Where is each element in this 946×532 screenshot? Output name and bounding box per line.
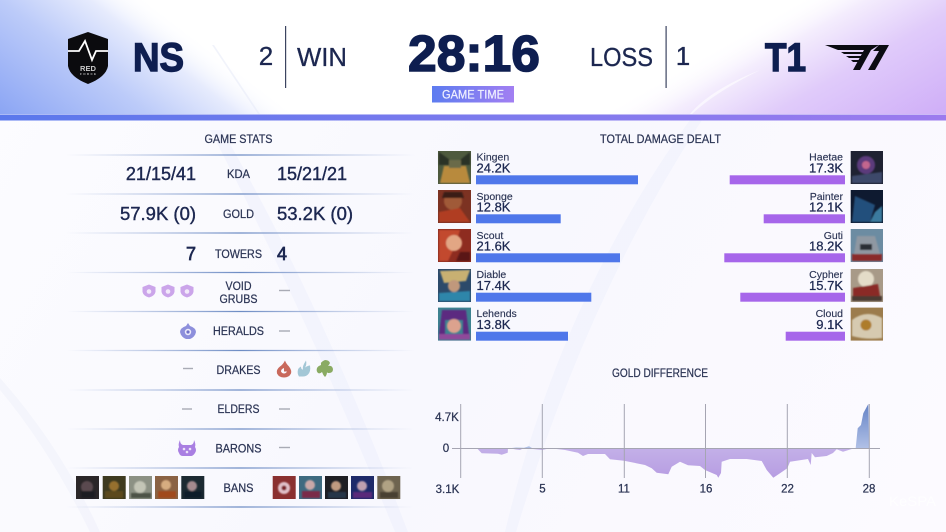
player: Lehends: 13.8K (476, 317, 511, 332)
player: Kingen (438, 151, 638, 184)
row: drakes: DRAKES (216, 365, 261, 377)
row: elders (182, 404, 290, 416)
header band (0, 0, 946, 114)
row: towers: TOWERS (215, 249, 262, 261)
player: Painter (764, 190, 883, 223)
icon: baron (178, 440, 196, 456)
bans: T1 side (273, 476, 400, 499)
axis labels: 11 (618, 484, 630, 496)
axis labels: 16 (700, 484, 712, 496)
row: gold: 57.9K (0) (120, 204, 196, 224)
row: heralds: HERALDS (213, 326, 264, 338)
axis labels (435, 412, 875, 496)
player: Scout: Scout (476, 230, 503, 242)
row: gold: GOLD (223, 209, 254, 221)
player: Cypher (740, 269, 883, 302)
player: Kingen: 24.2K (476, 160, 511, 176)
row: KDA: 15/21/21 (277, 164, 347, 184)
player: Guti: Guti (824, 230, 843, 242)
row: elders: ELDERS (218, 404, 260, 416)
player: Painter: 12.1K (809, 200, 843, 215)
player: Sponge: Sponge (476, 191, 513, 203)
T1 series losses: 1 (676, 41, 690, 71)
row: void grubs: GRUBS (220, 294, 258, 306)
panel: gold difference chart (435, 368, 880, 496)
axis labels: 0 (443, 443, 449, 455)
watermark: KeSPA: KeSPA (889, 493, 937, 509)
game timer: 28:16 (408, 25, 540, 82)
axis labels: 4.7K (435, 412, 459, 424)
axes (452, 404, 880, 478)
player: Lehends: Lehends (476, 308, 517, 320)
player: Sponge: 12.8K (476, 200, 511, 215)
player: Diable (438, 269, 591, 302)
player: Scout (438, 229, 620, 262)
game time tag: GAME TIME (442, 90, 504, 102)
divider right (666, 26, 667, 88)
player: Cypher: Cypher (809, 269, 843, 281)
icon: infernal drake (277, 360, 291, 378)
row: towers: 4 (277, 244, 287, 264)
row: towers: 7 (186, 244, 196, 264)
heading: total damage dealt: TOTAL DAMAGE DEALT (600, 134, 721, 146)
row: KDA (126, 164, 347, 184)
header accent bar (0, 114, 946, 120)
player: Cloud: Cloud (816, 308, 843, 320)
heading: gold difference: GOLD DIFFERENCE (612, 368, 708, 380)
row: bans (76, 476, 400, 499)
row: bans: BANS (224, 483, 254, 495)
axis labels: 28 (863, 484, 875, 496)
axis labels: 3.1K (436, 484, 460, 496)
icon: herald (180, 323, 196, 339)
player: Haetae: 17.3K (809, 160, 843, 176)
divider left (285, 26, 286, 88)
heading: game stats: GAME STATS (204, 134, 273, 146)
row: KDA: KDA (227, 169, 250, 181)
icon: mountain drake (317, 360, 333, 377)
player: Cloud: 9.1K (816, 317, 843, 332)
bans: NS side (76, 476, 204, 499)
axis labels: 22 (781, 484, 794, 496)
row: barons: BARONS (216, 444, 262, 456)
row: gold: 53.2K (0) (277, 204, 353, 224)
area: T1 gold lead (477, 448, 855, 478)
player: Scout: 21.6K (476, 239, 511, 254)
player: Diable: Diable (476, 269, 506, 281)
row: barons (178, 440, 290, 456)
LOSS label: LOSS (590, 42, 653, 72)
player: Lehends (438, 308, 568, 341)
area: NS gold lead (512, 404, 869, 448)
team name: NS: NS (133, 36, 184, 80)
icon: void grubs (142, 284, 194, 298)
row: heralds (180, 323, 290, 339)
row: drakes (183, 360, 333, 378)
axis labels: 5 (539, 484, 546, 496)
player: Guti: 18.2K (809, 239, 843, 254)
icon: NS Red Force shield logo: RED (80, 66, 96, 73)
player: Kingen: Kingen (476, 152, 509, 164)
icon: NS Red Force shield logo (68, 32, 108, 84)
player: Cypher: 15.7K (809, 278, 843, 293)
team name: T1: T1 (765, 36, 806, 80)
player: Sponge (438, 190, 561, 223)
row: gold (120, 204, 353, 224)
player: Guti (724, 229, 883, 262)
player: Cloud (786, 308, 883, 341)
icon: T1 logo (825, 45, 889, 70)
icon: NS Red Force shield logo: FORCE (80, 72, 96, 76)
game time tag (432, 86, 514, 102)
player: Diable: 17.4K (476, 278, 511, 293)
icon: ocean drake (298, 360, 310, 376)
NS series wins: 2 (259, 41, 273, 71)
player: Haetae (730, 151, 883, 184)
WIN label: WIN (297, 42, 347, 72)
player: Haetae: Haetae (809, 152, 843, 164)
row: KDA: 21/15/41 (126, 164, 196, 184)
player: Painter: Painter (810, 191, 843, 203)
panel: game stats (66, 134, 415, 507)
row: void grubs (142, 281, 290, 306)
panel: total damage dealt (438, 134, 883, 341)
row: towers (186, 244, 287, 264)
row: void grubs: VOID (226, 281, 252, 293)
